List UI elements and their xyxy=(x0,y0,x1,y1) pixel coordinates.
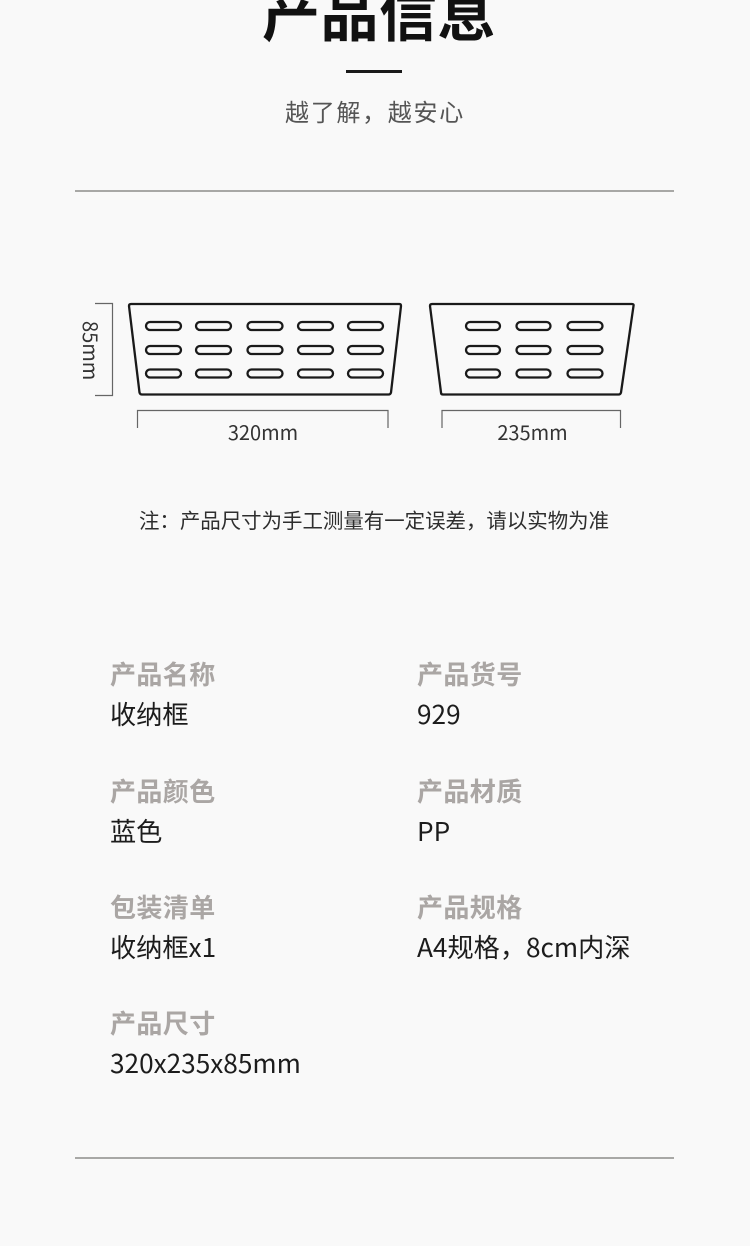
large width label: 320mm xyxy=(228,417,298,446)
large width bracket xyxy=(138,410,388,428)
measurement note: 注：产品尺寸为手工测量有一定误差，请以实物为准 xyxy=(139,504,609,534)
spec: specification: A4规格，8cm内深 xyxy=(417,927,631,965)
spec: material xyxy=(417,772,523,849)
spec: product number: 产品货号 xyxy=(417,655,523,692)
spec: package list: 包装清单 xyxy=(110,888,216,925)
small basket outline xyxy=(430,304,634,394)
spec: dimensions xyxy=(110,1004,301,1081)
spec: package list: 收纳框x1 xyxy=(110,927,216,965)
spec: product name: 产品名称 xyxy=(110,655,216,692)
dimension diagram xyxy=(77,302,635,446)
spec: dimensions: 产品尺寸 xyxy=(110,1004,216,1041)
large basket outline xyxy=(129,304,401,394)
spec: color: 产品颜色 xyxy=(110,772,216,809)
spec: product name: 收纳框 xyxy=(110,694,189,732)
spec: package list xyxy=(110,888,216,965)
spec: color: 蓝色 xyxy=(110,811,162,849)
height label: 85mm xyxy=(77,321,106,380)
spec: dimensions: 320x235x85mm xyxy=(110,1043,301,1081)
small width label: 235mm xyxy=(497,417,568,446)
height bracket xyxy=(95,304,112,396)
spec: specification: 产品规格 xyxy=(417,888,523,925)
subtitle: 越了解，越安心 xyxy=(285,93,465,128)
spec: product number xyxy=(417,655,523,732)
spec: material: 产品材质 xyxy=(417,772,523,809)
spec: material: PP xyxy=(417,811,450,849)
title underline xyxy=(346,70,402,73)
spec: color xyxy=(110,772,216,849)
spec: product name xyxy=(110,655,216,732)
spec: specification xyxy=(417,888,631,965)
spec: product number: 929 xyxy=(417,694,461,732)
small width bracket xyxy=(442,410,620,428)
